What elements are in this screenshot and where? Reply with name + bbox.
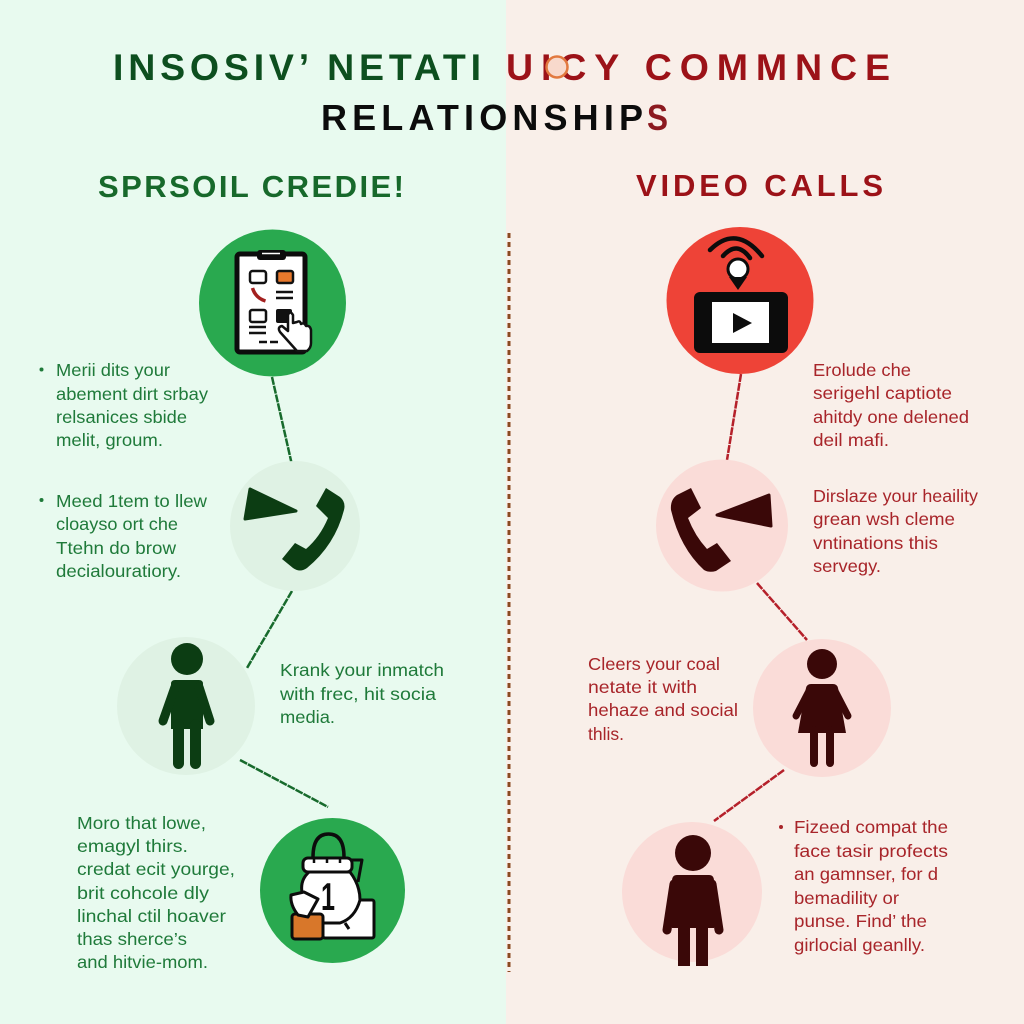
text block: left 2: Meed 1tem to llew	[56, 491, 207, 511]
text block: left 2: Ttehn do brow	[56, 538, 176, 558]
text block: left 3	[279, 660, 444, 727]
text block: right 1: Erolude che	[813, 360, 911, 380]
text block: left 4: and hitvie-mom.	[77, 952, 208, 972]
icon: phone and arrow left	[230, 461, 360, 591]
text block: left 4: thas sherce’s	[77, 929, 187, 949]
text block: right 4: girlocial geanlly.	[794, 935, 925, 955]
text block: right 4	[779, 817, 948, 955]
text block: right 1	[813, 360, 969, 450]
text block: right 2: Dirslaze your heaility	[813, 486, 978, 506]
title: INSOSIV’ NETATI	[113, 46, 483, 88]
text block: right 4: Fizeed compat the	[794, 817, 948, 837]
icon: phone and arrow right	[656, 460, 788, 592]
text block: right 3: netate it with	[588, 677, 697, 697]
text block: right 4: bemadility or	[794, 888, 899, 908]
text block: right 2: servegy.	[813, 556, 881, 576]
text block: left 1: Merii dits your	[56, 360, 170, 380]
title: RELATIONSHIP	[321, 97, 645, 138]
text block: right 3	[588, 654, 738, 744]
text block: right 2: vntinations this	[813, 533, 938, 553]
title: UICY COMMNCE	[506, 46, 892, 88]
text block: left 4: linchal ctil hoaver	[77, 906, 226, 926]
icon: person right	[622, 822, 762, 966]
text block: right 1: deil mafi.	[813, 430, 889, 450]
heading: right column: VIDEO CALLS	[636, 168, 883, 203]
icon: video with signal	[666, 227, 814, 374]
text block: right 3: hehaze and social	[588, 700, 738, 720]
text block: left 4: Moro that lowe,	[77, 813, 206, 833]
text block: left 1: relsanices sbide	[56, 407, 187, 427]
text block: right 4: face tasir profects	[794, 841, 948, 861]
text block: right 2	[813, 486, 978, 576]
icon: bag with number	[260, 818, 405, 963]
text block: left 3: with frec, hit socia	[279, 684, 436, 704]
icon: tablet with hand	[199, 230, 346, 376]
text block: left 3: Krank your inmatch	[280, 660, 444, 680]
heading: left column: SPRSOIL CREDIE!	[98, 169, 404, 204]
icon: bag with number: 1	[321, 876, 335, 919]
title	[113, 46, 892, 138]
title: S	[647, 97, 668, 138]
text block: left 4: emagyl thirs.	[77, 836, 188, 856]
text block: right 3: Cleers your coal	[588, 654, 720, 674]
icon: person in dress	[753, 639, 891, 777]
text block: right 4: an gamnser, for d	[794, 864, 938, 884]
text block: left 2: cloayso ort che	[56, 514, 178, 534]
text block: left 2: decialouratiory.	[56, 561, 181, 581]
text block: right 1: serigehl captiote	[813, 383, 952, 403]
text block: right 4: punse. Find’ the	[794, 911, 927, 931]
text block: right 2: grean wsh cleme	[813, 509, 955, 529]
text block: left 4	[77, 813, 235, 972]
text block: right 3: thlis.	[588, 724, 624, 744]
text block: left 1	[40, 360, 208, 450]
connector lines: left	[240, 377, 328, 807]
text block: left 4: brit cohcole dly	[77, 883, 209, 903]
text block: left 1: melit, groum.	[56, 430, 163, 450]
text block: left 4: credat ecit yourge,	[77, 859, 235, 879]
text block: left 2	[40, 491, 207, 581]
connector lines: right	[714, 374, 807, 821]
text block: right 1: ahitdy one delened	[813, 407, 969, 427]
text block: left 1: abement dirt srbay	[56, 384, 208, 404]
text block: left 3: media.	[280, 707, 335, 727]
icon: person left	[117, 637, 255, 775]
